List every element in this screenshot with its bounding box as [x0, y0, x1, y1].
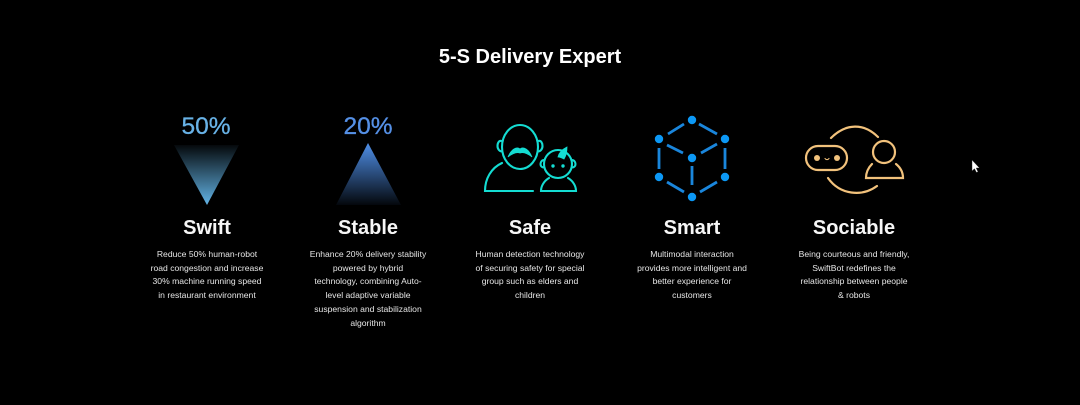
- column: Sociable: [799, 217, 909, 300]
- description: Stable: [310, 249, 426, 328]
- description: Safe: group such as elders and: [482, 276, 578, 286]
- description: Safe: of securing safety for special: [476, 263, 584, 273]
- description: Stable: Enhance 20% delivery stability: [310, 249, 426, 259]
- description: Swift: in restaurant environment: [158, 290, 256, 300]
- stat: 50%: 50%: [181, 113, 231, 140]
- description: Sociable: SwiftBot redefines the: [812, 263, 896, 273]
- description: Sociable: & robots: [838, 290, 870, 300]
- column: Swift: [151, 217, 263, 300]
- description: Stable: algorithm: [350, 318, 386, 328]
- heading: Smart: Smart: [664, 217, 720, 239]
- description: Swift: [151, 249, 263, 300]
- description: Safe: [476, 249, 584, 300]
- icon: robot and person: [806, 127, 903, 193]
- description: Sociable: [799, 249, 909, 300]
- description: Stable: powered by hybrid: [333, 263, 403, 273]
- description: Stable: suspension and stabilization: [314, 304, 422, 314]
- description: Smart: better experience for: [653, 276, 731, 286]
- heading: Sociable: Sociable: [813, 217, 895, 239]
- stat: 20%: 20%: [343, 113, 393, 140]
- title: 5-S Delivery Expert: [439, 46, 621, 68]
- column: Safe: [476, 217, 584, 300]
- column: Stable: [310, 217, 426, 328]
- description: Smart: customers: [672, 290, 712, 300]
- description: Safe: children: [515, 290, 545, 300]
- column: Smart: [637, 217, 747, 300]
- chart: inverted triangle: [174, 145, 239, 205]
- description: Swift: road congestion and increase: [151, 263, 263, 273]
- description: Swift: Reduce 50% human-robot: [157, 249, 257, 259]
- description: Smart: provides more intelligent and: [637, 263, 747, 273]
- description: Smart: Multimodal interaction: [650, 249, 734, 259]
- heading: Stable: Stable: [338, 217, 398, 239]
- chart: upright triangle: [336, 143, 401, 205]
- heading: Safe: Safe: [509, 217, 551, 239]
- icon: elder and child: [485, 125, 576, 191]
- description: Stable: technology, combining Auto-: [314, 276, 422, 286]
- description: Stable: level adaptive variable: [325, 290, 411, 300]
- description: Sociable: relationship between people: [800, 276, 908, 286]
- description: Swift: 30% machine running speed: [153, 276, 261, 286]
- description: Smart: [637, 249, 747, 300]
- icon: network cube: [655, 116, 729, 201]
- icon: mouse cursor: [972, 160, 980, 172]
- description: Safe: Human detection technology: [476, 249, 584, 259]
- description: Sociable: Being courteous and friendly,: [799, 249, 909, 259]
- heading: Swift: Swift: [183, 217, 231, 239]
